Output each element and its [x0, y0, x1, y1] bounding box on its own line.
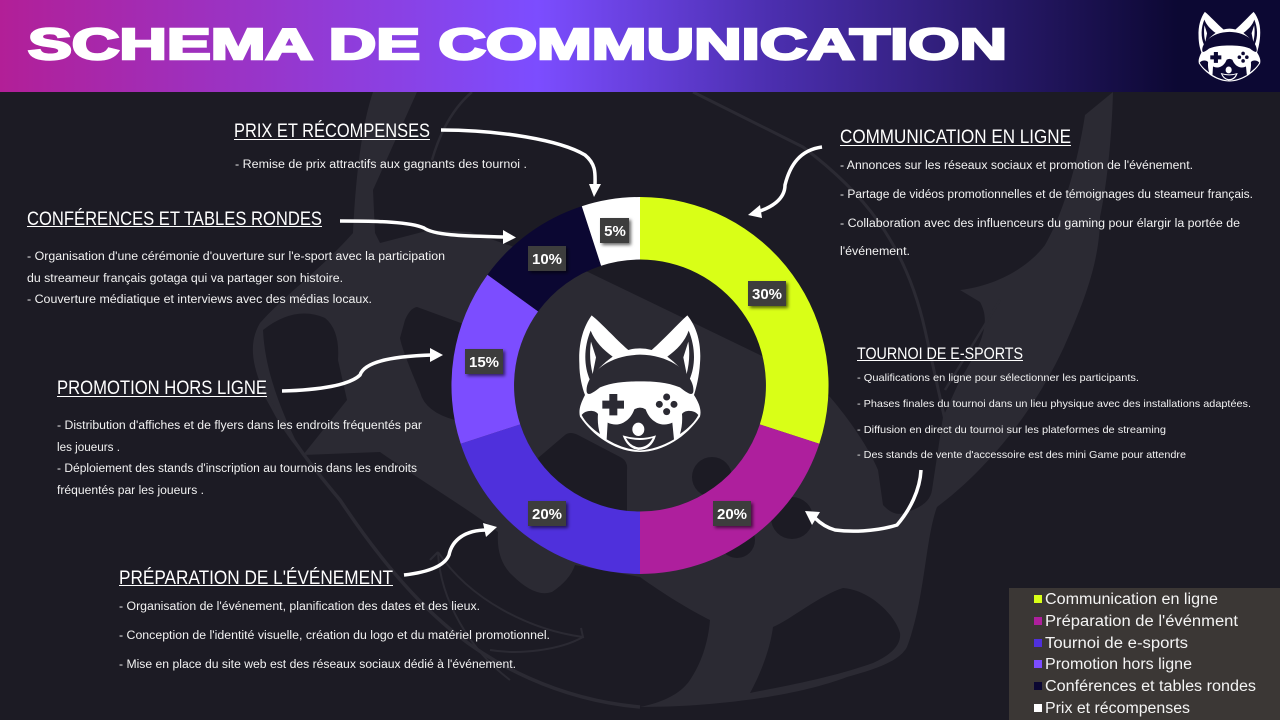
text — [840, 160, 1253, 258]
text: - Conception de l'identité visuelle, création du logo et du matériel promotionnel. — [119, 630, 550, 642]
text: - Annonces sur les réseaux sociaux et promotion de l'événement. — [840, 160, 1193, 172]
legend item: conferences: Conférences et tables rondes — [1045, 678, 1256, 695]
header band — [0, 0, 1280, 92]
panel: preparation de l'evenement — [119, 568, 550, 671]
heading: PROMOTION HORS LIGNE — [57, 378, 267, 399]
label 5%: 5% — [604, 223, 626, 240]
text: - Déploiement des stands d'inscription au tournois dans les endroits — [57, 463, 417, 475]
label 20% tournoi: 20% — [532, 506, 562, 523]
panel: promotion hors ligne — [57, 378, 422, 497]
slice: promotion 15% — [451, 275, 538, 444]
legend item: preparation: Préparation de l'événment — [1045, 613, 1239, 630]
donut chart — [451, 197, 829, 574]
label 30%: 30% — [752, 286, 782, 303]
heading: CONFÉRENCES ET TABLES RONDES — [27, 209, 322, 230]
icon: header fox logo — [1198, 12, 1260, 82]
label 15% — [465, 349, 503, 374]
text: - Remise de prix attractifs aux gagnants des tournoi . — [235, 159, 527, 171]
watermark: large faded fox — [253, 92, 1113, 707]
text: - Couverture médiatique et interviews avec des médias locaux. — [27, 294, 372, 306]
icon: central fox logo — [579, 315, 701, 452]
text: fréquentés par les joueurs . — [57, 485, 204, 497]
legend item: communication en ligne: Communication en ligne — [1045, 591, 1218, 608]
arrow: conferences — [340, 221, 516, 244]
label 20% preparation: 20% — [717, 506, 747, 523]
text — [119, 601, 550, 671]
label 10%: 10% — [532, 251, 562, 268]
text: - Organisation de l'événement, planification des dates et des lieux. — [119, 601, 480, 613]
text: l'événement. — [840, 246, 910, 258]
heading: PRIX ET RÉCOMPENSES — [234, 121, 430, 142]
slice: preparation 20% — [640, 424, 819, 574]
arrow: communication — [748, 147, 822, 218]
slice: tournoi 20% — [461, 424, 640, 574]
label 20% preparation — [713, 501, 751, 526]
legend — [1009, 588, 1280, 720]
arrow: promotion — [282, 348, 443, 391]
heading: TOURNOI DE E-SPORTS — [857, 345, 1023, 363]
panel: conferences et tables rondes — [27, 209, 445, 306]
arrow: prix — [441, 130, 601, 197]
title: SCHEMA DE COMMUNICATION — [28, 20, 1007, 69]
text: - Des stands de vente d'accessoire est des mini Game pour attendre — [857, 449, 1186, 461]
label 30% — [748, 281, 786, 306]
arrow: preparation — [404, 523, 497, 575]
panel: tournoi de e-sports — [857, 345, 1251, 461]
text: - Distribution d'affiches et de flyers dans les endroits fréquentés par — [57, 420, 422, 432]
label 5% — [600, 218, 629, 243]
text: - Organisation d'une cérémonie d'ouverture sur l'e-sport avec la participation — [27, 251, 445, 263]
heading: COMMUNICATION EN LIGNE — [840, 127, 1071, 148]
arrows — [282, 130, 921, 575]
text: - Mise en place du site web est des réseaux sociaux dédié à l'événement. — [119, 659, 516, 671]
legend item: prix: Prix et récompenses — [1045, 700, 1190, 717]
label 20% tournoi — [528, 501, 566, 526]
label 10% — [528, 246, 566, 271]
panel: prix et recompenses — [234, 121, 527, 171]
text: - Qualifications en ligne pour sélectionner les participants. — [857, 372, 1139, 384]
text: - Phases finales du tournoi dans un lieu physique avec des installations adaptées. — [857, 398, 1251, 410]
heading: PRÉPARATION DE L'ÉVÉNEMENT — [119, 568, 393, 589]
text: - Diffusion en direct du tournoi sur les plateformes de streaming — [857, 424, 1166, 436]
text — [27, 251, 445, 306]
slice: communication en ligne 30% — [640, 197, 829, 444]
text: les joueurs . — [57, 442, 120, 454]
legend item: promotion: Promotion hors ligne — [1045, 656, 1192, 673]
slice: prix 5% — [582, 197, 640, 266]
label 15%: 15% — [469, 354, 499, 371]
text — [57, 420, 422, 497]
text: du streameur français gotaga qui va partager son histoire. — [27, 273, 343, 285]
arrow: tournoi — [805, 470, 921, 531]
legend item: tournoi: Tournoi de e-sports — [1045, 635, 1188, 652]
text: - Collaboration avec des influenceurs du gaming pour élargir la portée de — [840, 218, 1240, 230]
text: - Partage de vidéos promotionnelles et de témoignages du steameur français. — [840, 189, 1253, 201]
slice: conferences 10% — [488, 206, 601, 311]
panel: communication en ligne — [840, 127, 1253, 258]
percentage labels — [465, 218, 786, 526]
text — [857, 372, 1251, 461]
